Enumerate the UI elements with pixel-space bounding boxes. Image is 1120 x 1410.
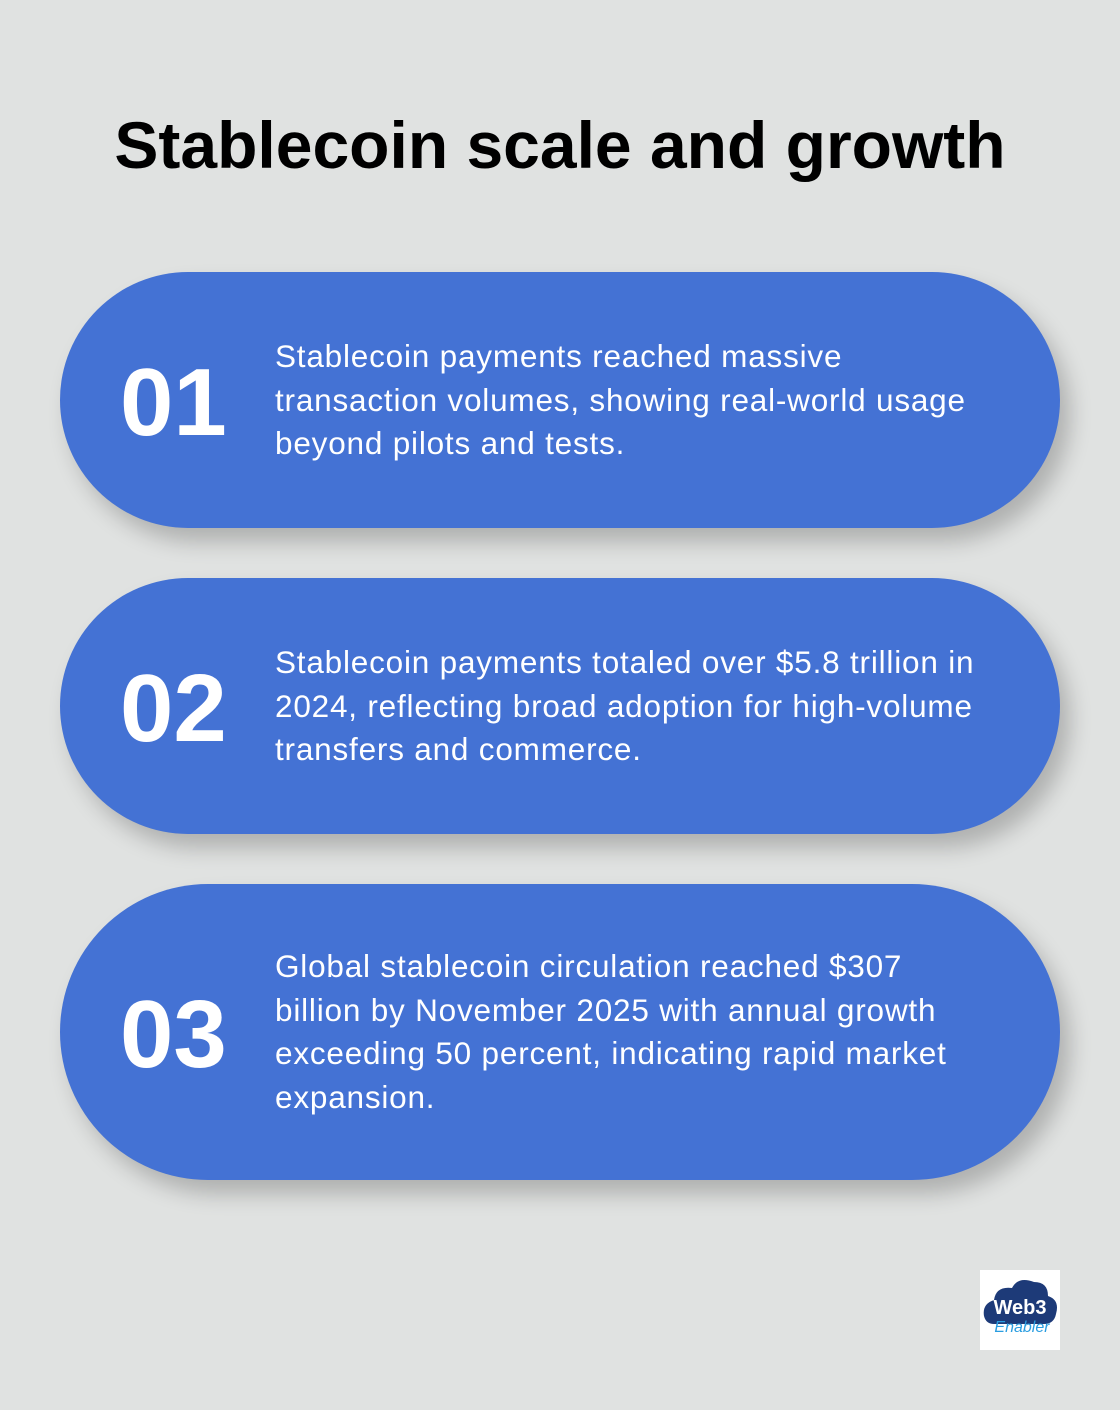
number 02: 02 <box>120 655 227 762</box>
logo: Enabler <box>994 1319 1050 1336</box>
logo: Web3 <box>994 1297 1046 1319</box>
text 03: exceeding 50 percent, indicating rapid market <box>275 1035 947 1071</box>
text 03: Global stablecoin circulation reached $307 <box>275 948 902 984</box>
text 03 <box>275 948 947 1114</box>
text 01: beyond pilots and tests. <box>275 425 625 461</box>
panel: item 02 <box>60 578 1060 834</box>
text 02 <box>275 644 974 767</box>
logo <box>980 1270 1060 1350</box>
text 01: transaction volumes, showing real-world usage <box>275 382 966 418</box>
text 02: 2024, reflecting broad adoption for high-volume <box>275 688 973 724</box>
number 01: 01 <box>120 349 227 456</box>
text 03: billion by November 2025 with annual growth <box>275 992 936 1028</box>
panel: item 01 <box>60 272 1060 528</box>
panel: item 03 <box>60 884 1060 1180</box>
text 01 <box>275 338 966 461</box>
text 03: expansion. <box>275 1078 435 1114</box>
text 02: transfers and commerce. <box>275 731 642 767</box>
number 03: 03 <box>120 981 227 1088</box>
title: Stablecoin scale and growth <box>114 108 1006 182</box>
text 01: Stablecoin payments reached massive <box>275 338 842 374</box>
text 02: Stablecoin payments totaled over $5.8 trillion in <box>275 644 974 680</box>
